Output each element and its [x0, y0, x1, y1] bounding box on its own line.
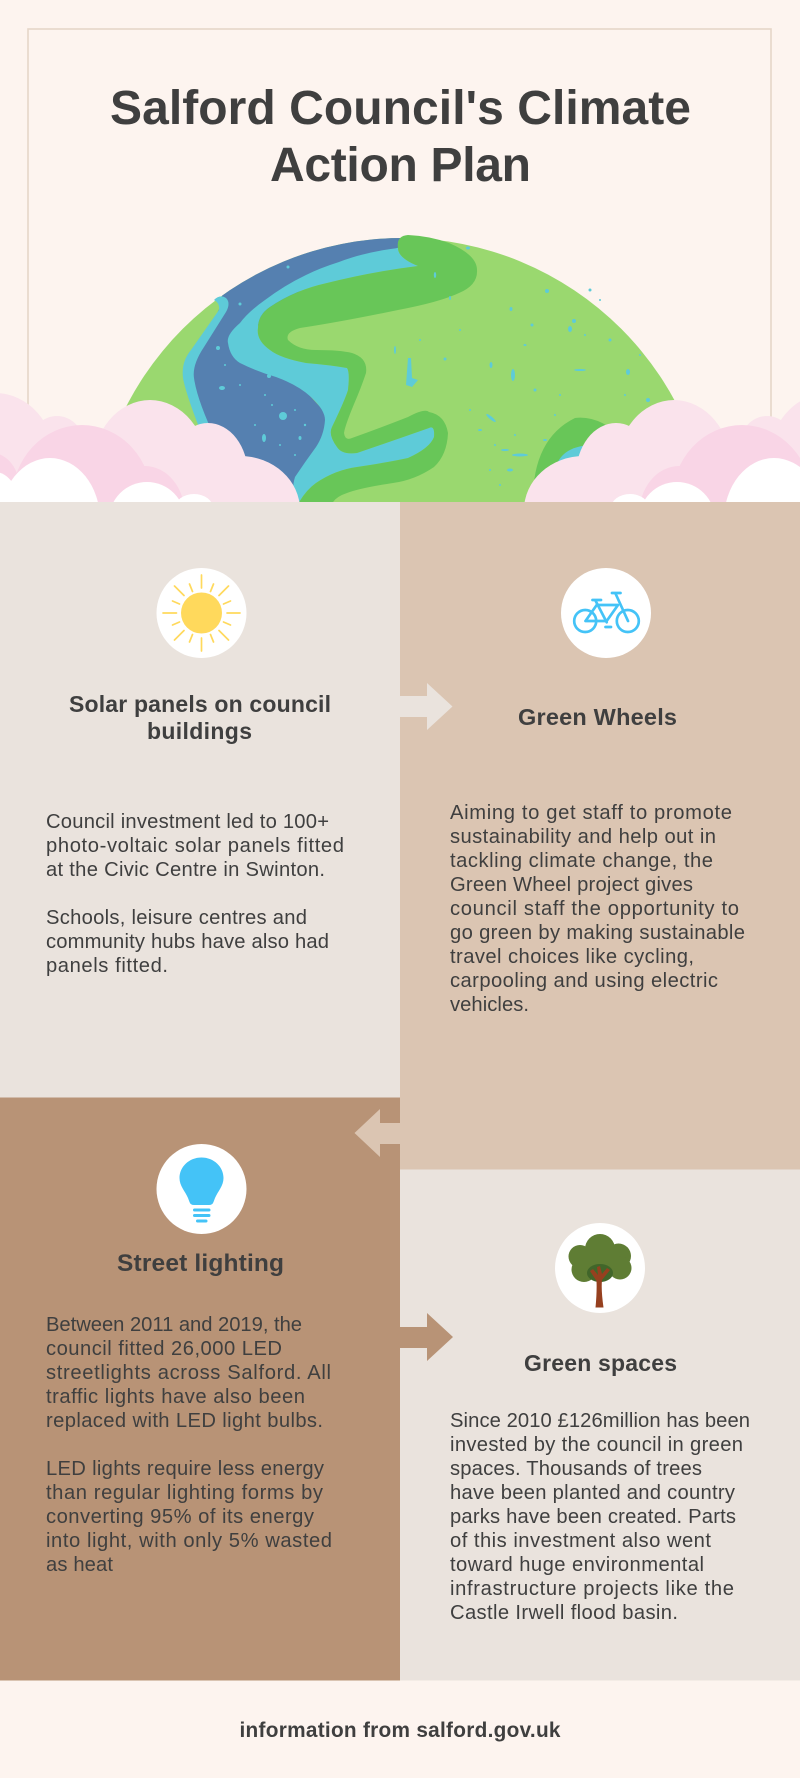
text: street lighting: council fitted 26,000 LED [46, 1338, 282, 1360]
text: green spaces: have been planted and country [450, 1482, 736, 1504]
text: green wheels: carpooling and using electric [450, 970, 718, 992]
heading: street lighting: Street lighting [117, 1250, 284, 1277]
text: green wheels: Green Wheel project gives [450, 874, 693, 896]
text: green wheels: council staff the opportunity to [450, 898, 739, 920]
title [110, 82, 691, 192]
text: green spaces: invested by the council in green [450, 1434, 743, 1456]
text: solar panels: photo-voltaic solar panels fitted [46, 835, 344, 857]
text: green wheels [450, 802, 745, 1016]
illustration: globe and clouds [0, 235, 800, 502]
title: Salford Council's Climate [110, 82, 691, 135]
arrow: street lighting to green spaces [400, 1313, 453, 1361]
text: green wheels: Aiming to get staff to promote [450, 802, 732, 824]
text: street lighting: replaced with LED light bulbs. [46, 1410, 323, 1432]
footer: information from salford.gov.uk [240, 1719, 561, 1742]
text: solar panels: Schools, leisure centres and [46, 907, 307, 929]
title: Action Plan [270, 139, 531, 192]
text: solar panels [46, 811, 344, 977]
text: green wheels: vehicles. [450, 994, 529, 1016]
text: green wheels: travel choices like cycling, [450, 946, 694, 968]
heading: green spaces: Green spaces [524, 1350, 677, 1376]
text: street lighting: traffic lights have also been [46, 1386, 305, 1408]
text: solar panels: Council investment led to 100+ [46, 811, 329, 833]
text: solar panels: at the Civic Centre in Swinton. [46, 859, 325, 881]
panel: solar panels [0, 502, 400, 1098]
icon: bicycle [561, 568, 651, 658]
panel: green spaces [400, 1170, 800, 1680]
text: green wheels: go green by making sustainable [450, 922, 745, 944]
panel: green wheels [400, 502, 800, 1170]
text: street lighting: LED lights require less energy [46, 1458, 325, 1480]
left clouds [0, 394, 300, 502]
text: green spaces: Castle Irwell flood basin. [450, 1602, 678, 1624]
text: street lighting: Between 2011 and 2019, the [46, 1314, 302, 1336]
heading: solar panels [69, 691, 331, 744]
right clouds [524, 400, 800, 502]
text: green spaces: spaces. Thousands of trees [450, 1458, 702, 1480]
text: green wheels: tackling climate change, the [450, 850, 713, 872]
heading: solar panels: buildings [147, 718, 252, 744]
icon: sun [156, 568, 246, 658]
text: green spaces [450, 1410, 750, 1624]
arrow: solar panels to green wheels [400, 683, 452, 730]
arrow: green wheels to street lighting [354, 1109, 400, 1157]
text: green wheels: sustainability and help out in [450, 826, 716, 848]
text: green spaces: toward huge environmental [450, 1554, 704, 1576]
text: solar panels: community hubs have also had [46, 931, 329, 953]
text: street lighting: as heat [46, 1554, 113, 1576]
panel: street lighting [0, 1098, 400, 1680]
text: street lighting [46, 1314, 332, 1576]
text: green spaces: infrastructure projects like the [450, 1578, 734, 1600]
icon: tree [555, 1223, 645, 1313]
text: street lighting: into light, with only 5% wasted [46, 1530, 332, 1552]
globe [126, 235, 674, 502]
text: street lighting: than regular lighting forms by [46, 1482, 324, 1504]
icon: light bulb [156, 1144, 246, 1234]
text: green spaces: Since 2010 £126million has been [450, 1410, 750, 1432]
heading: solar panels: Solar panels on council [69, 691, 331, 717]
text: green spaces: parks have been created. Parts [450, 1506, 736, 1528]
text: solar panels: panels fitted. [46, 955, 168, 977]
text: street lighting: converting 95% of its energy [46, 1506, 315, 1528]
heading: green wheels: Green Wheels [518, 704, 677, 730]
text: street lighting: streetlights across Salford. All [46, 1362, 331, 1384]
text: green spaces: of this investment also went [450, 1530, 711, 1552]
